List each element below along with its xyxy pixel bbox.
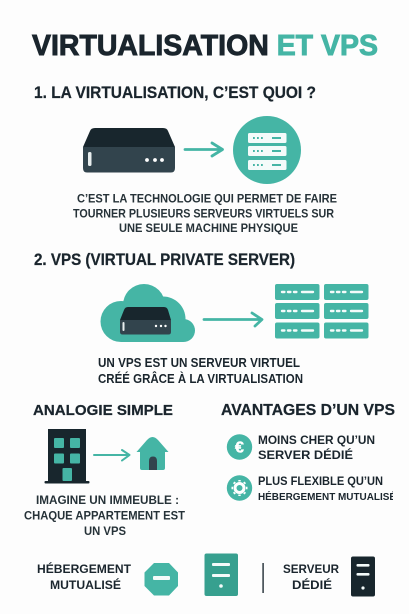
text: VPS definition: UN VPS EST UN SERVEUR VIRTUEL bbox=[98, 356, 300, 370]
text: analogy: UN VPS bbox=[84, 524, 126, 538]
divider bbox=[262, 563, 264, 593]
text: VPS definition: CRÉÉ GRÂCE À LA VIRTUALISATION bbox=[98, 371, 303, 386]
text: more flexible bbox=[258, 476, 393, 500]
text: definition of virtualisation: C’EST LA TECHNOLOGIE QUI PERMET DE FAIRE bbox=[77, 192, 337, 206]
label: dedicated server: SERVEUR bbox=[283, 562, 339, 576]
text: more flexible: PLUS FLEXIBLE QU’UN bbox=[258, 474, 383, 488]
text: definition of virtualisation: UNE SEULE MACHINE PHYSIQUE bbox=[119, 221, 298, 235]
icon: apartment building bbox=[44, 429, 90, 484]
label: shared hosting bbox=[37, 561, 132, 592]
text: analogy: CHAQUE APPARTEMENT EST bbox=[24, 508, 186, 522]
text: VPS definition bbox=[98, 356, 303, 386]
arrow: server to virtual servers bbox=[185, 143, 222, 156]
text: analogy: IMAGINE UN IMMEUBLE : bbox=[36, 493, 179, 507]
text: cheaper: SERVER DÉDIÉ bbox=[258, 449, 353, 462]
label: shared hosting: MUTUALISÉ bbox=[50, 577, 121, 592]
icon: server grid bbox=[275, 284, 368, 338]
title: VIRTUALISATION ET VPS bbox=[32, 30, 378, 62]
icon: teal server document bbox=[204, 554, 238, 596]
heading: section 2: 2. VPS (VIRTUAL PRIVATE SERVER) bbox=[34, 251, 295, 269]
text: cheaper: MOINS CHER QU’UN bbox=[258, 433, 375, 447]
text: definition of virtualisation bbox=[73, 192, 337, 235]
icon: dark server tower bbox=[351, 556, 375, 596]
heading: analogie simple: ANALOGIE SIMPLE bbox=[33, 402, 173, 419]
label: shared hosting: HÉBERGEMENT bbox=[37, 561, 132, 576]
icon: cloud with server bbox=[100, 284, 195, 342]
text: definition of virtualisation: TOURNER PLUSIEURS SERVEURS VIRTUELS SUR bbox=[73, 206, 334, 220]
text: more flexible: HÉBERGEMENT MUTUALISÉ bbox=[258, 490, 396, 503]
arrow: cloud to servers bbox=[204, 313, 262, 326]
icon: physical server bbox=[83, 128, 175, 172]
icon: house bbox=[136, 437, 168, 470]
text: analogy bbox=[24, 493, 186, 538]
label: dedicated server bbox=[283, 562, 339, 592]
heading: avantages: AVANTAGES D’UN VPS bbox=[221, 402, 395, 419]
text: cheaper bbox=[258, 433, 375, 462]
icon: virtual servers circle bbox=[233, 116, 301, 184]
icon: octagon minus bbox=[144, 563, 178, 596]
icon: euro: € bbox=[235, 440, 244, 456]
icon: euro bbox=[227, 434, 252, 460]
label: dedicated server: DÉDIÉ bbox=[292, 577, 332, 592]
heading: section 1: 1. LA VIRTUALISATION, C’EST QUOI ? bbox=[34, 84, 316, 102]
arrow: building to home bbox=[94, 450, 130, 460]
icon: gear bbox=[227, 475, 252, 501]
